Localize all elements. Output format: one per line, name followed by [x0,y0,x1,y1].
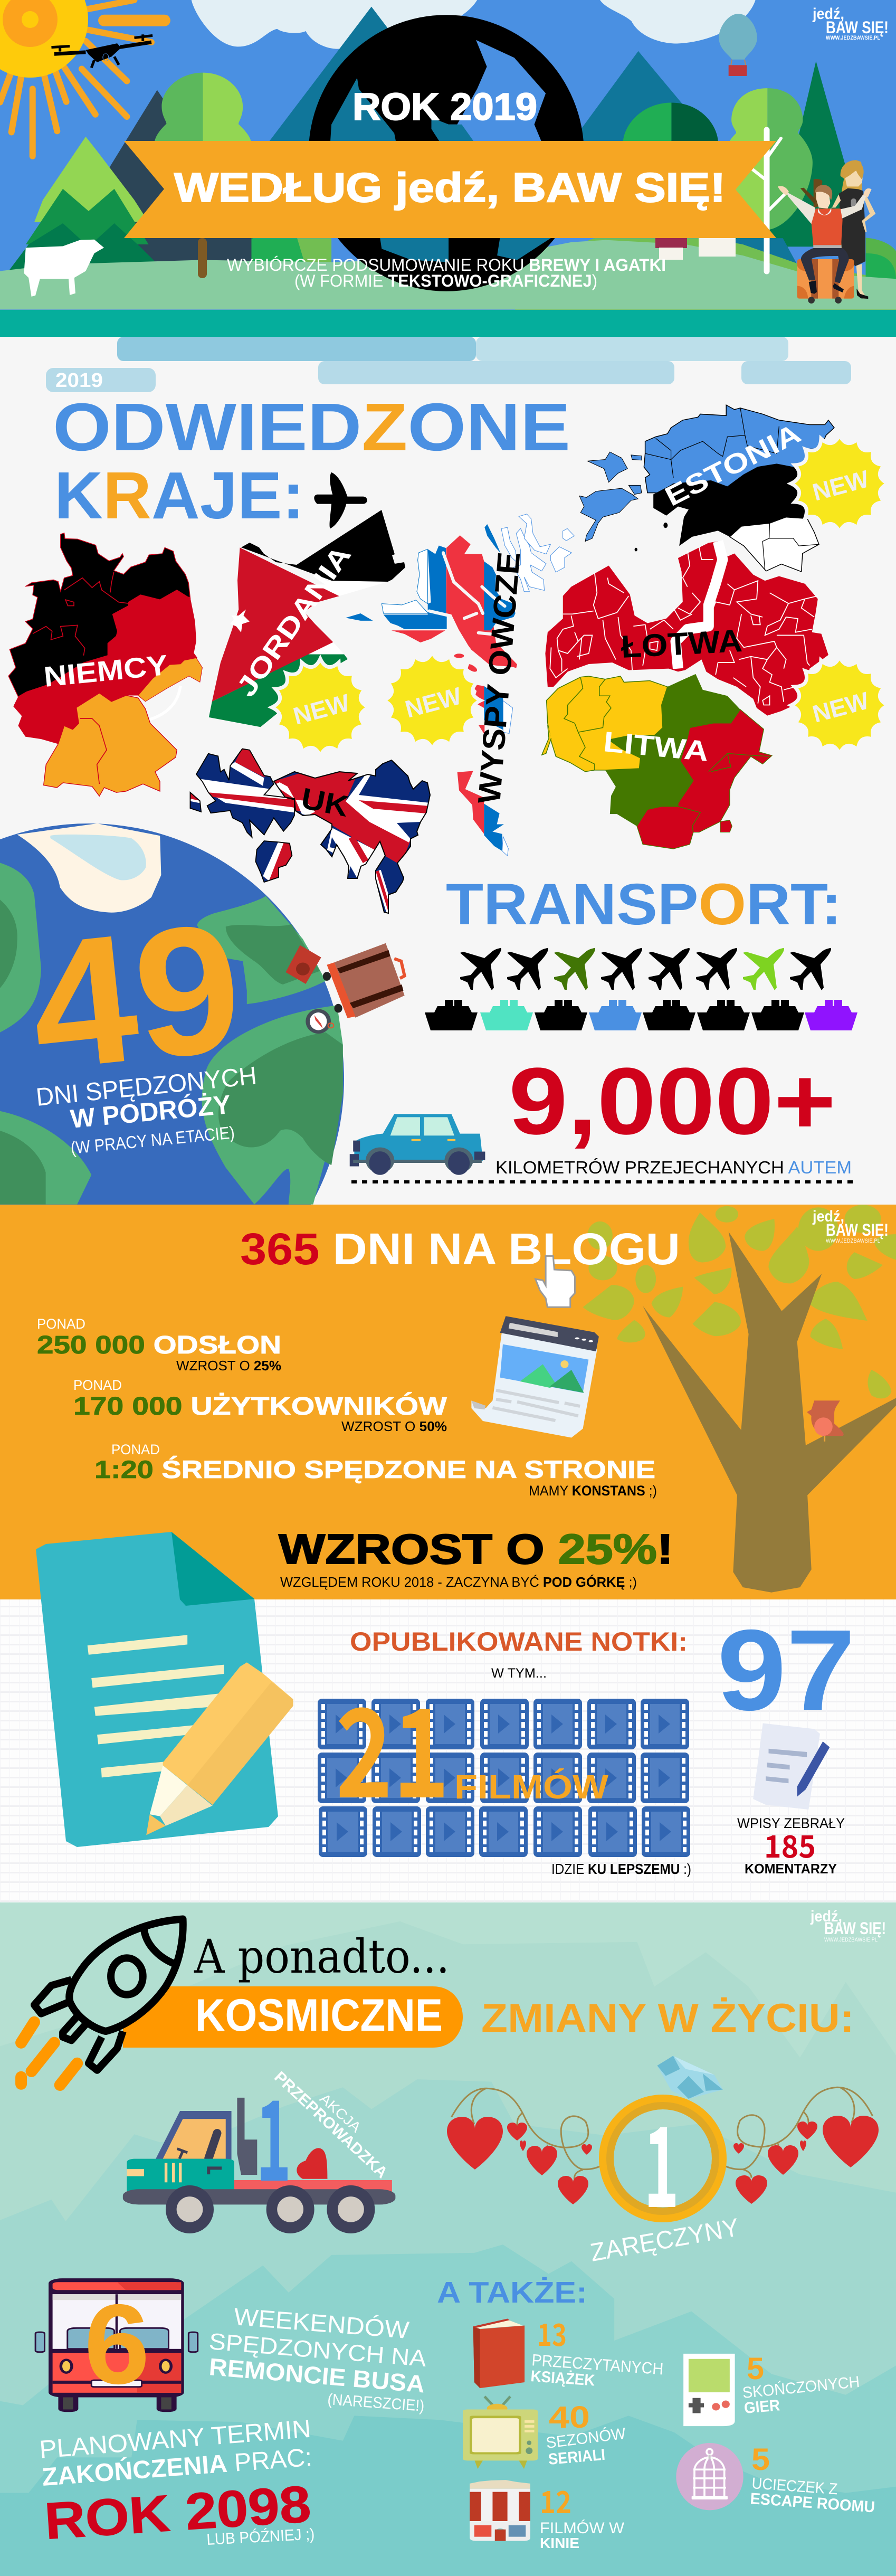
stat: books: 13 [537,2310,567,2355]
mountains [109,7,852,264]
number: 21 films: 21 [336,1655,450,1833]
label: Faroe Islands: WYSPY OWCZE [471,551,527,805]
logo: jedź, [810,1908,842,1925]
stat: users: PONAD [73,1377,122,1393]
icon: sign post [198,238,207,278]
text: planned completion: PLANOWANY TERMIN [39,2415,312,2464]
number: 21 films: FILMÓW [454,1768,609,1806]
map: faroe islands [346,514,574,856]
text: kilometres driven: KILOMETRÓW PRZEJECHANYCH AUTEM [495,1158,852,1177]
number: kilometres: 9,000+ [509,1048,836,1154]
map: estonia [579,405,834,572]
number: 6 weekends: 6 [84,2280,150,2408]
stat: books: PRZECZYTANYCH [531,2351,664,2378]
pill: cosmic [123,1986,463,2048]
map: uk [190,749,431,914]
trees [8,73,813,273]
stat: series [545,2400,627,2468]
stat: cinema films [540,2478,625,2551]
stat: games: GIER [744,2397,781,2417]
stat: users: 170 000 UŻYTKOWNIKÓW [73,1391,447,1420]
icon: bus [35,2278,198,2412]
heading: furthermore: A ponadto... [194,1929,450,1984]
panel: paper background [0,337,896,1205]
text: comments: 185 [764,1822,816,1867]
stat: cinema films: KINIE [540,2535,579,2551]
panel: blog section [0,1205,896,1599]
stat: page views: WZROST O 25% [176,1358,281,1374]
text: days in travel [35,1062,258,1158]
badge: new latvia: NEW [809,686,872,728]
stat: games [742,2352,861,2417]
badge: new jordan: NEW [290,688,352,730]
icon: sheep [24,240,104,297]
stat: page views [37,1316,281,1374]
stat: games: SKOŃCZONYCH [742,2373,861,2402]
icon: note with pen [753,1723,830,1810]
stat: page views: 250 000 ODSŁON [37,1331,281,1359]
icon: white tree trunk [752,130,785,271]
year pill: 2019 [55,370,103,392]
stat: books [530,2310,664,2390]
text: days in travel: DNI SPĘDZONYCH [35,1062,258,1112]
icon: plane [314,472,367,528]
text: moving action: AKCJA [317,2090,364,2135]
row: planes [460,948,831,990]
icon: engagement ring [606,2056,723,2215]
subtitle [227,255,666,290]
stat: cinema films: 12 [540,2478,571,2522]
number: 1 engagement: 1 [644,2079,679,2239]
banner [124,141,776,238]
number: 1 move: 1 [256,2052,291,2213]
stat: series: SEZONÓW [545,2425,627,2452]
text: including: W TYM... [491,1666,547,1681]
paper top clouds [117,337,851,384]
logo: jedź, [812,1208,844,1225]
text: comments: KOMENTARZY [745,1861,837,1877]
icon: hot air balloon [719,14,757,76]
illustration: couple on suitcase [778,160,875,304]
stat: escape rooms: ESCAPE ROOMU [750,2490,875,2516]
tree [583,1205,896,1593]
panel: header scene [0,0,896,337]
heading: 365 days on blog: 365 DNI NA BLOGU [240,1224,680,1274]
icon: book [473,2318,525,2388]
number: 97: 97 [717,1606,855,1735]
heading: growth: WZROST O 25% ! [279,1526,673,1573]
stat: users [73,1377,447,1434]
icon: steering wheel silhouette [309,15,584,291]
title: according to the blog: WEDŁUG jedź, BAW SIĘ! [174,164,726,211]
logo [812,1208,889,1244]
badge: new estonia [791,435,888,532]
text: bus renovation: REMONCIE BUSA [208,2353,426,2398]
heading: visited countries [53,390,570,533]
text: planned completion: ZAKOŃCZENIA PRAC: [41,2443,313,2492]
stat: escape rooms: 5 [751,2442,770,2477]
icon: house [655,238,736,260]
text: bus renovation: WEEKENDÓW [233,2303,411,2344]
label: Latvia: ŁOTWA [620,623,743,665]
badge: new faroe [384,652,481,749]
icon: rocket [21,1919,183,2085]
text: engagement: ZARĘCZYNY [588,2213,741,2267]
number: 21 films [336,1655,609,1833]
icon: compass [306,1009,333,1034]
text: bus renovation: (NARESZCIE!) [327,2391,425,2415]
icon: web page [471,1316,599,1438]
text: planned completion [39,2415,313,2492]
sun [0,0,165,156]
stat: time on page: 1:20 ŚREDNIO SPĘDZONE NA STRONIE [94,1455,655,1483]
heading: visited countries: KRAJE: [54,458,304,533]
map: jordan [209,510,405,727]
globe [0,823,344,1205]
text: bus renovation: SPĘDZONYCH NA [208,2328,427,2372]
big number 49: 49 [22,885,250,1109]
text: getting better: IDZIE KU LEPSZEMU :) [551,1861,691,1877]
logo: WWW.JEDZBAWSIE.PL [824,1937,878,1943]
title: rok 2019: ROK 2019 [352,86,537,128]
text: comments: WPISY ZEBRAŁY [737,1815,845,1831]
logo: WWW.JEDZBAWSIE.PL [826,35,880,41]
map: lithuania [542,674,772,849]
stat: escape rooms [750,2442,875,2516]
icon: passport [285,945,321,984]
teal band [0,310,896,337]
icon: truck [123,2098,395,2233]
stat: series: SERIALI [548,2446,606,2468]
text: or later: LUB PÓŹNIEJ ;) [206,2525,315,2549]
number: year 2098: ROK 2098 [43,2475,312,2550]
icon: bird [807,1400,844,1442]
panel: mint section [0,1902,896,2576]
stat: page views: PONAD [37,1316,85,1332]
logo [810,1908,886,1943]
stat: cinema films: FILMÓW W [540,2520,625,2537]
dotted line [351,1180,853,1183]
stat: time on page: PONAD [111,1442,160,1457]
badge: new faroe: NEW [402,681,464,723]
icon: game console [683,2354,735,2426]
label: Germany: NIEMCY [42,649,169,693]
stat: books: KSIĄŻEK [530,2367,596,2390]
icon: tv [463,2397,538,2469]
text: relative to 2018: WZGLĘDEM ROKU 2018 - ZACZYNA BYĆ POD GÓRKĘ ;) [280,1574,637,1590]
stat: time on page: MAMY KONSTANS ;) [529,1483,657,1499]
subtitle: (W FORMIE TEKSTOWO-GRAFICZNEJ) [294,271,597,290]
label: Estonia: ESTONIA [660,418,806,513]
subtitle: WYBIÓRCZE PODSUMOWANIE ROKU BREWY I AGATKI [227,255,666,274]
icon: hand cursor [536,1256,575,1307]
text: moving action: PRZEPROWADZKA [271,2068,391,2182]
stat: games: 5 [747,2352,764,2386]
badge: new jordan [272,659,369,756]
film strip grid [318,1699,690,1857]
map: germany [8,533,202,796]
stat: users: WZROST O 50% [341,1418,447,1434]
icon: cage [676,2443,744,2510]
heading: changes in life: ZMIANY W ŻYCIU: [481,1996,854,2041]
text: comments [737,1815,845,1877]
text: days in travel: (W PRACY NA ETACIE) [70,1122,235,1158]
icon: car [350,1114,485,1175]
panel: grid paper section [0,1599,896,1902]
logo: WWW.JEDZBAWSIE.PL [826,1238,880,1244]
text: bus renovation [208,2303,427,2415]
heading: also: A TAKŻE: [437,2276,587,2309]
vines and hearts [447,2087,879,2204]
logo: jedź, [812,5,844,23]
badge: new latvia [791,657,888,754]
heading: transport: TRANSPORT: [446,872,842,937]
pill: cosmic: KOSMICZNE [195,1990,443,2041]
clouds [192,0,756,49]
stat: series: 40 [549,2400,590,2435]
map: latvia [545,542,828,716]
icon: document with pencil [36,1532,293,1847]
heading: published posts: OPUBLIKOWANE NOTKI: [350,1627,688,1656]
text: days in travel: W PODRÓŻY [69,1090,232,1134]
ground [0,238,896,311]
year pill [46,368,156,392]
icon: popcorn [470,2480,530,2541]
icon: suitcase [323,943,405,1018]
row: ferries [425,1000,857,1030]
label: UK: UK [299,781,351,823]
label: Jordan: JORDANIA [231,540,357,703]
stat: time on page [94,1442,657,1499]
stat: escape rooms: UCIECZEK Z [751,2475,838,2498]
sky [0,0,896,311]
badge: new estonia: NEW [809,465,872,506]
label: Lithuania: LITWA [602,726,710,768]
logo [812,5,889,41]
icon: drone [51,34,152,68]
heading: visited countries: ODWIED ZONE [53,390,570,465]
